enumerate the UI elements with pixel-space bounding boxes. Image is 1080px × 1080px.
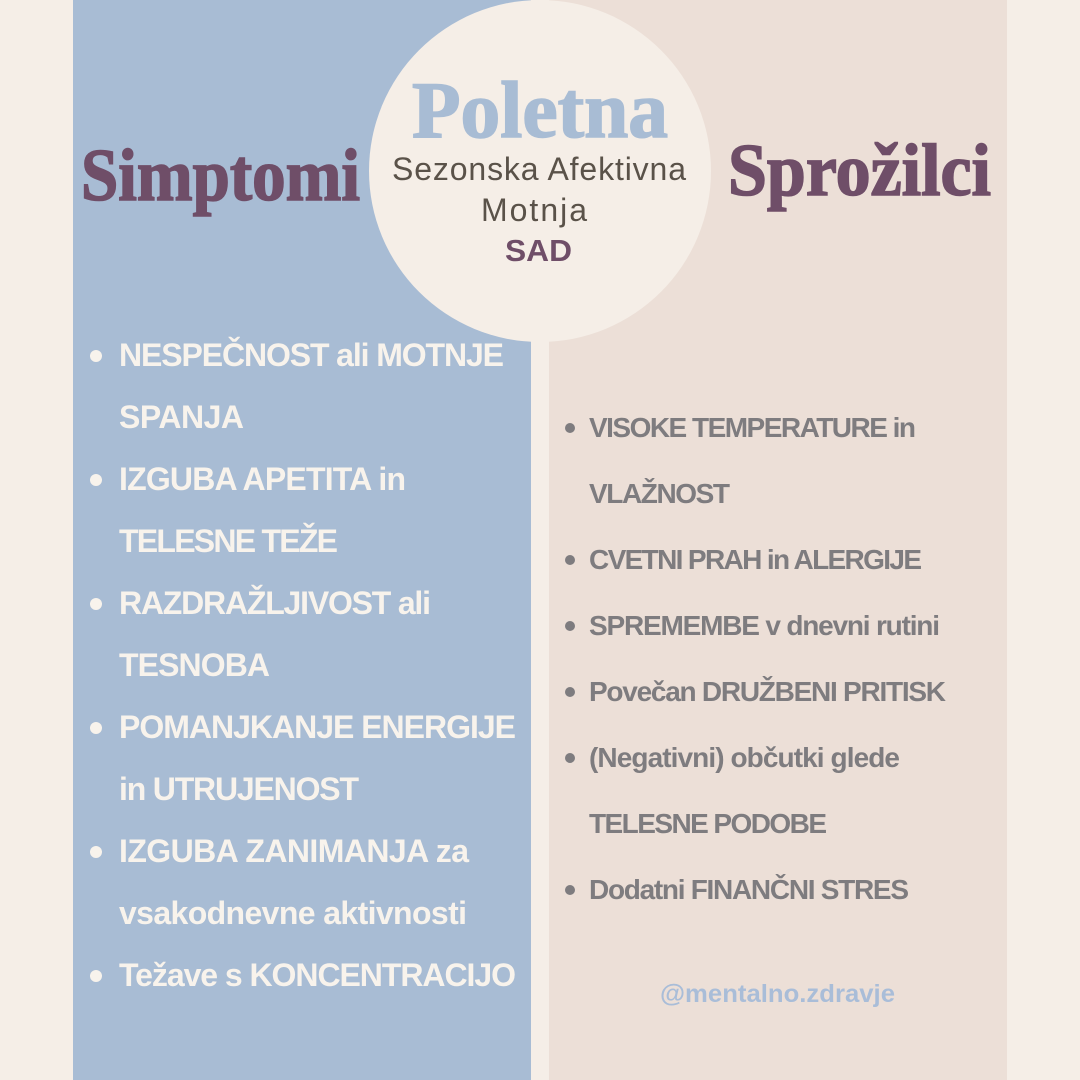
list: triggers — [565, 412, 946, 905]
bullet item: social pressure: Povečan DRUŽBENI PRITISK — [589, 676, 946, 707]
bullet item: insomnia: NESPEČNOST ali MOTNJE — [119, 337, 504, 373]
bullet item: body image: TELESNE PODOBE — [589, 808, 827, 839]
panel: triggers — [549, 0, 1007, 1080]
bullet item: body image — [565, 742, 900, 839]
heading: Sprožilci: Sprožilci — [728, 130, 991, 212]
bullet item: energy: POMANJKANJE ENERGIJE — [119, 709, 516, 745]
bullet item: irritability — [90, 585, 431, 683]
bullet item: energy: in UTRUJENOST — [119, 771, 359, 807]
subtitle: SAD: SAD — [505, 233, 572, 268]
bullet item: pollen: CVETNI PRAH in ALERGIJE — [589, 544, 922, 575]
bullet item: temperature — [565, 412, 916, 509]
bullet item: interest: IZGUBA ZANIMANJA za — [119, 833, 469, 869]
heading: Simptomi: Simptomi — [81, 135, 360, 217]
bullet item: insomnia — [90, 337, 504, 435]
title: Poletna: Poletna — [412, 67, 668, 155]
center title circle — [369, 0, 711, 342]
bullet item: routine: SPREMEMBE v dnevni rutini — [589, 610, 940, 641]
subtitle line 1: Sezonska Afektivna — [392, 151, 686, 187]
bullet item: temperature: VLAŽNOST — [589, 478, 730, 509]
handle: @mentalno.zdravje — [660, 980, 895, 1008]
bullet item: concentration: Težave s KONCENTRACIJO — [119, 957, 516, 993]
bullet item: financial stress: Dodatni FINANČNI STRES — [589, 873, 909, 905]
bullet item: appetite: IZGUBA APETITA in — [119, 461, 406, 497]
bullet item: body image: (Negativni) občutki glede — [589, 742, 900, 773]
bullet item: interest — [90, 833, 469, 931]
bullet item: insomnia: SPANJA — [119, 399, 244, 435]
bullet item: appetite — [90, 461, 406, 559]
subtitle line 2: Motnja — [481, 192, 587, 228]
bullet item: interest: vsakodnevne aktivnosti — [119, 895, 467, 931]
circle — [369, 0, 711, 342]
panel background: symptoms — [73, 0, 531, 1080]
bullet item: energy — [90, 709, 516, 807]
list: symptoms — [90, 337, 516, 993]
bullet item: temperature: VISOKE TEMPERATURE in — [589, 412, 916, 443]
bullet item: appetite: TELESNE TEŽE — [119, 523, 338, 559]
panel: symptoms — [73, 0, 531, 1080]
bullet item: irritability: TESNOBA — [119, 647, 270, 683]
bullet item: irritability: RAZDRAŽLJIVOST ali — [119, 585, 431, 621]
panel background: triggers — [549, 0, 1007, 1080]
